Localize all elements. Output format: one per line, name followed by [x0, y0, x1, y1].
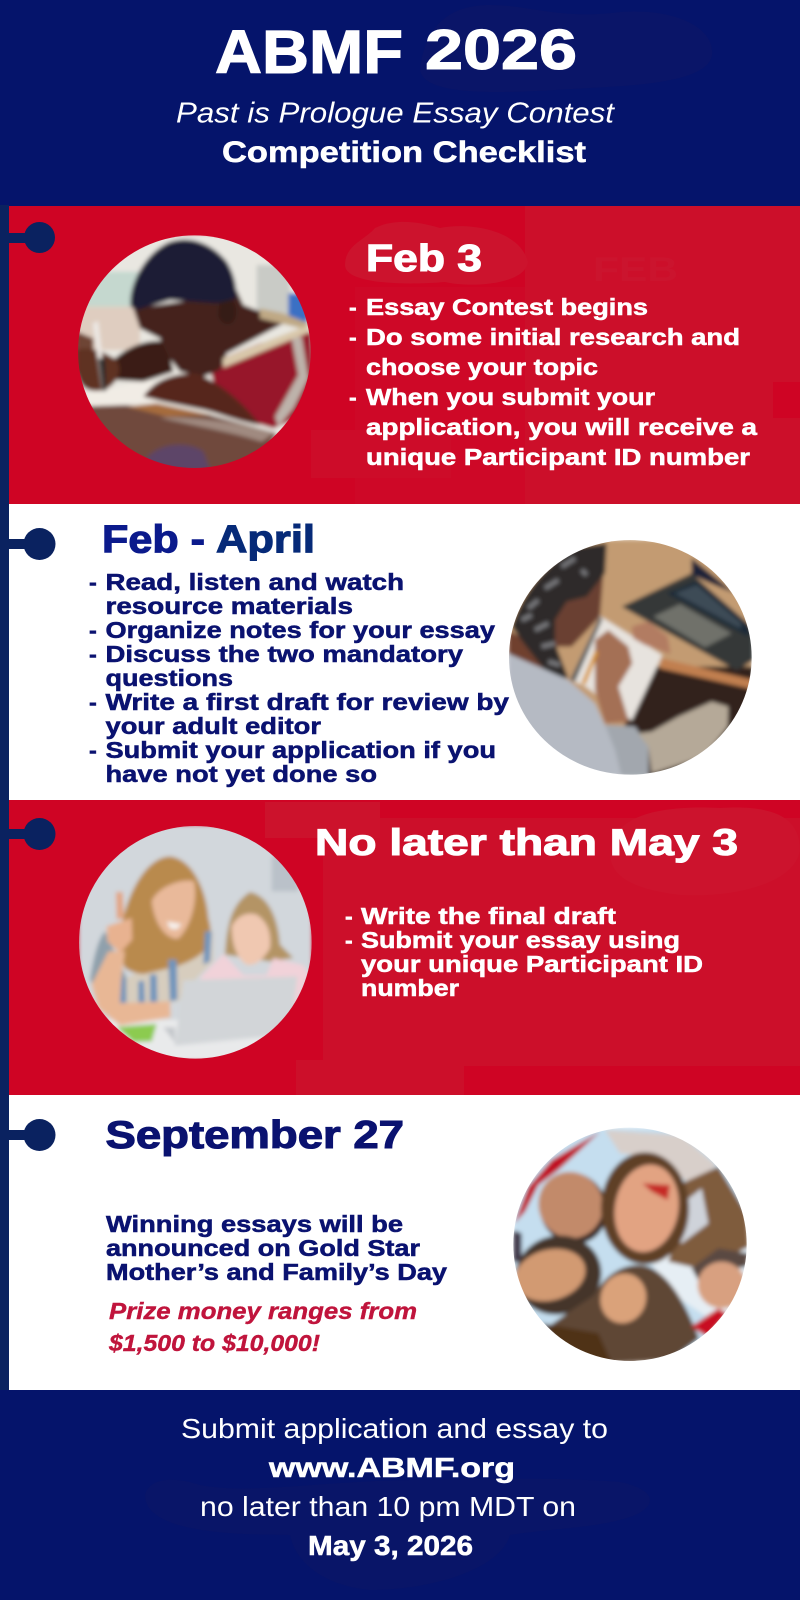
photo: mother and daughter at laptop — [78, 825, 312, 1061]
heading: feb - april: Feb - — [102, 518, 205, 562]
panel: feb 3: FEB — [593, 251, 678, 289]
text block: feb to april checklist — [89, 569, 509, 787]
text block: feb to april checklist: your adult editor — [106, 713, 321, 739]
callout: prize money: $1,500 to $10,000! — [108, 1330, 320, 1356]
subtitle: Past is Prologue Essay Contest — [176, 98, 616, 130]
photo: children in a huddle — [506, 1128, 748, 1363]
text block: winners announcement: Winning essays will be — [106, 1211, 403, 1237]
text block: final submission checklist: - — [345, 903, 353, 929]
footer text: submit line: Submit application and essay to — [181, 1413, 608, 1444]
text block: winners announcement — [106, 1211, 447, 1285]
heading: competition checklist: Competition Checklist — [222, 136, 586, 169]
text block: feb to april checklist: Organize notes for your essay — [106, 617, 495, 643]
timeline marker: feb - april — [8, 528, 56, 560]
text block: feb to april checklist: Discuss the two mandatory — [106, 641, 463, 667]
heading: feb - april: April — [216, 518, 315, 562]
text block: feb 3 checklist: Do some initial research and — [366, 324, 740, 350]
title — [215, 18, 577, 86]
text block: final submission checklist — [345, 903, 703, 1001]
panel: no later than may 3 — [0, 800, 800, 1095]
text block: feb 3 checklist: application, you will receive a — [366, 414, 757, 440]
text block: feb to april checklist: - — [89, 737, 97, 763]
title: ABMF — [215, 18, 403, 86]
text block: feb 3 checklist: Essay Contest begins — [366, 294, 648, 320]
text block: winners announcement: Mother’s and Family’s Day — [106, 1259, 447, 1285]
text block: feb 3 checklist — [349, 294, 757, 470]
text block: final submission checklist: - — [345, 927, 353, 953]
text block: feb 3 checklist: - — [349, 324, 357, 350]
heading: feb - april — [102, 518, 315, 562]
footer text: deadline date: May 3, 2026 — [308, 1530, 473, 1561]
text block: final submission checklist: your unique Participant ID — [361, 951, 703, 977]
text block: feb 3 checklist: - — [349, 384, 357, 410]
panel: header — [0, 0, 800, 206]
timeline marker: may 3 — [8, 818, 56, 850]
panel: september 27 — [106, 1119, 747, 1361]
callout: prize money: Prize money ranges from — [109, 1298, 417, 1324]
text block: feb to april checklist: have not yet done so — [106, 761, 377, 787]
text block: final submission checklist: Write the final draft — [361, 903, 616, 929]
timeline marker: feb 3 — [8, 222, 55, 253]
footer text: website: www.ABMF.org — [268, 1452, 515, 1483]
title: 2026 — [425, 18, 577, 82]
text block: feb to april checklist: - — [89, 569, 97, 595]
callout: prize money — [108, 1298, 417, 1356]
panel: footer — [0, 1390, 800, 1600]
text block: feb to april checklist: Write a first draft for review by — [106, 689, 509, 715]
text block: feb to april checklist: Submit your application if you — [106, 737, 496, 763]
heading: september 27: September 27 — [106, 1114, 404, 1157]
text block: feb to april checklist: resource materials — [106, 593, 353, 619]
photo: boy writing — [77, 233, 313, 472]
text block: feb 3 checklist: unique Participant ID number — [366, 444, 750, 470]
photo: girl with notebook and laptop — [508, 539, 753, 777]
heading: no later than may 3: No later than May 3 — [315, 821, 738, 863]
text block: final submission checklist: Submit your essay using — [361, 927, 680, 953]
text block: feb 3 checklist: choose your topic — [366, 354, 598, 380]
text block: feb to april checklist: - — [89, 617, 97, 643]
heading: feb 3: Feb 3 — [366, 238, 482, 280]
text block: feb to april checklist: questions — [106, 665, 233, 691]
panel: feb to april — [90, 524, 752, 788]
text block: feb to april checklist: - — [89, 689, 97, 715]
text block: feb 3 checklist: - — [349, 294, 357, 320]
text block: winners announcement: announced on Gold Star — [106, 1235, 420, 1261]
timeline marker: september 27 — [8, 1119, 56, 1151]
panel: feb 3 — [0, 206, 800, 504]
text block: feb 3 checklist: When you submit your — [366, 384, 655, 410]
timeline line — [0, 205, 9, 1390]
text block: feb to april checklist: Read, listen and watch — [106, 569, 404, 595]
text block: final submission checklist: number — [361, 975, 459, 1001]
footer text: deadline time: no later than 10 pm MDT on — [200, 1491, 576, 1522]
text block: feb to april checklist: - — [89, 641, 97, 667]
